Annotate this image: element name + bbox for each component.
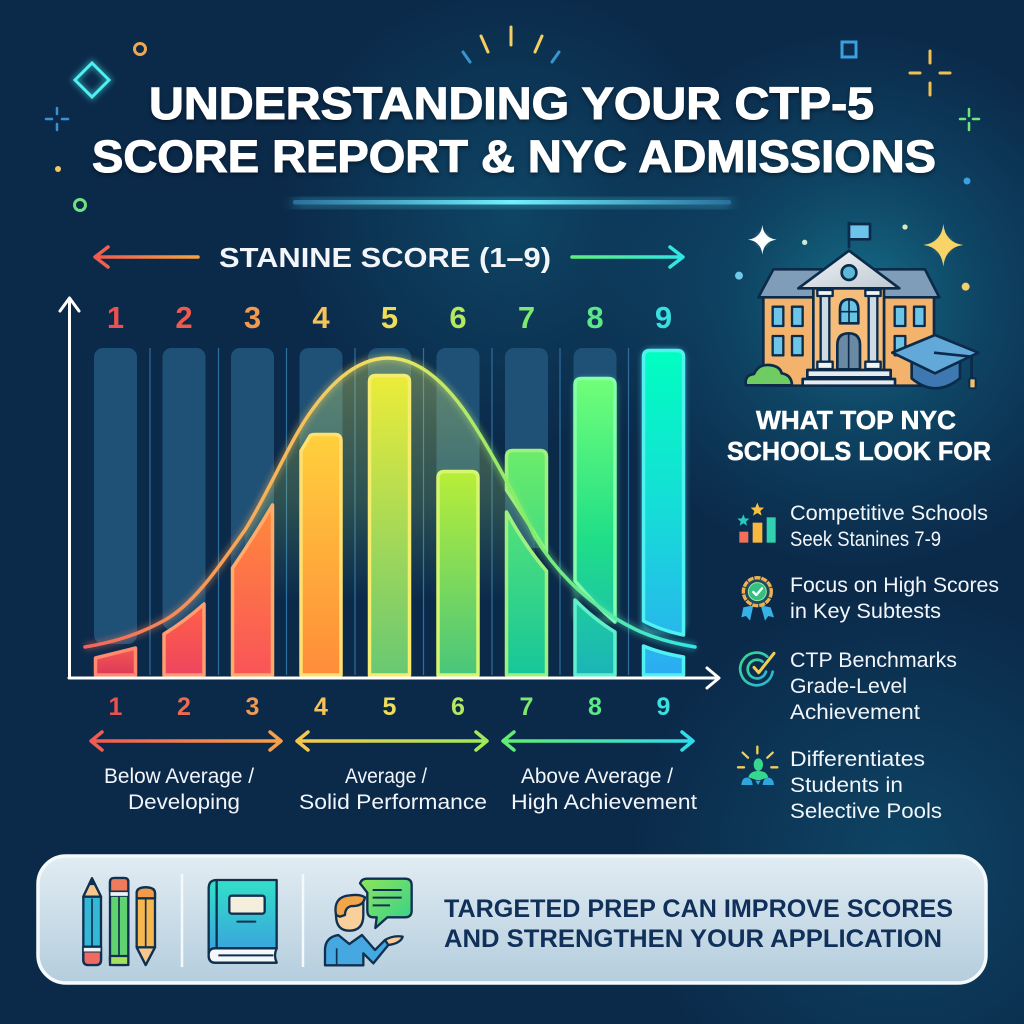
item: differentiates students <box>738 747 942 823</box>
title <box>92 78 936 182</box>
item: competitive schools: Competitive Schools <box>790 502 988 525</box>
heading: what top NYC schools look for: SCHOOLS LOOK FOR <box>727 436 991 466</box>
panel: targeted prep callout <box>38 856 986 983</box>
item: CTP benchmarks: CTP Benchmarks <box>790 649 957 672</box>
item: CTP benchmarks: Achievement <box>790 701 920 724</box>
stanine numbers above chart <box>107 300 672 335</box>
icon: tutor with speech bubble <box>325 879 412 965</box>
stanine numbers above chart: 9 <box>655 300 672 335</box>
stanine numbers below chart: 2 <box>177 693 191 721</box>
title: SCORE REPORT & NYC ADMISSIONS <box>92 131 936 182</box>
stanine numbers below chart: 5 <box>383 693 397 721</box>
item: high scores in key subtests: Focus on High Scores <box>790 574 999 597</box>
range labels: High Achievement <box>511 791 697 814</box>
callout text <box>444 895 953 953</box>
range labels: Below Average / <box>104 765 254 788</box>
axis heading: stanine score <box>95 242 683 273</box>
stanine numbers above chart: 6 <box>449 300 467 335</box>
icon: book <box>209 880 277 963</box>
item: high scores in key subtests <box>741 574 999 623</box>
item: CTP benchmarks: Grade-Level <box>790 675 907 698</box>
range labels: Above Average / <box>521 765 673 788</box>
callout text: AND STRENGTHEN YOUR APPLICATION <box>444 925 942 953</box>
range labels <box>104 765 697 814</box>
item: differentiates students: Students in <box>790 774 903 797</box>
stanine numbers below chart: 4 <box>314 693 328 721</box>
stanine numbers above chart: 4 <box>312 300 330 335</box>
icon: school with graduation cap <box>735 222 978 388</box>
item: competitive schools <box>737 502 988 551</box>
decorative sparkles <box>46 27 979 210</box>
item: CTP benchmarks <box>740 649 957 724</box>
heading: what top NYC schools look for <box>727 405 991 466</box>
item: differentiates students: Differentiates <box>790 748 925 771</box>
stanine numbers above chart: 8 <box>586 300 604 335</box>
stanine numbers above chart: 7 <box>518 300 535 335</box>
title: UNDERSTANDING YOUR CTP-5 <box>149 78 874 129</box>
stanine numbers above chart: 5 <box>381 300 398 335</box>
item: high scores in key subtests: in Key Subtests <box>790 600 941 623</box>
stanine numbers below chart: 9 <box>657 693 670 721</box>
title underline <box>293 199 731 207</box>
range labels: Average / <box>345 765 427 788</box>
stanine numbers below chart: 7 <box>520 693 533 721</box>
axis heading: stanine score: STANINE SCORE (1–9) <box>219 242 551 273</box>
stanine numbers above chart: 1 <box>107 300 124 335</box>
icon: pencils <box>83 878 155 965</box>
range labels: Developing <box>128 791 240 814</box>
bar chart with bell curve <box>60 298 719 688</box>
range arrows <box>91 732 693 750</box>
stanine numbers below chart: 6 <box>451 693 465 721</box>
callout text: TARGETED PREP CAN IMPROVE SCORES <box>444 895 953 923</box>
heading: what top NYC schools look for: WHAT TOP NYC <box>756 405 956 435</box>
stanine numbers below chart: 3 <box>246 693 259 721</box>
item: competitive schools: Seek Stanines 7-9 <box>790 528 941 551</box>
stanine numbers below chart: 8 <box>588 693 602 721</box>
range labels: Solid Performance <box>299 791 487 814</box>
item: differentiates students: Selective Pools <box>790 800 942 823</box>
stanine numbers below chart: 1 <box>109 693 123 721</box>
stanine numbers above chart: 2 <box>175 300 193 335</box>
stanine numbers above chart: 3 <box>244 300 261 335</box>
stanine numbers below chart <box>109 693 670 721</box>
